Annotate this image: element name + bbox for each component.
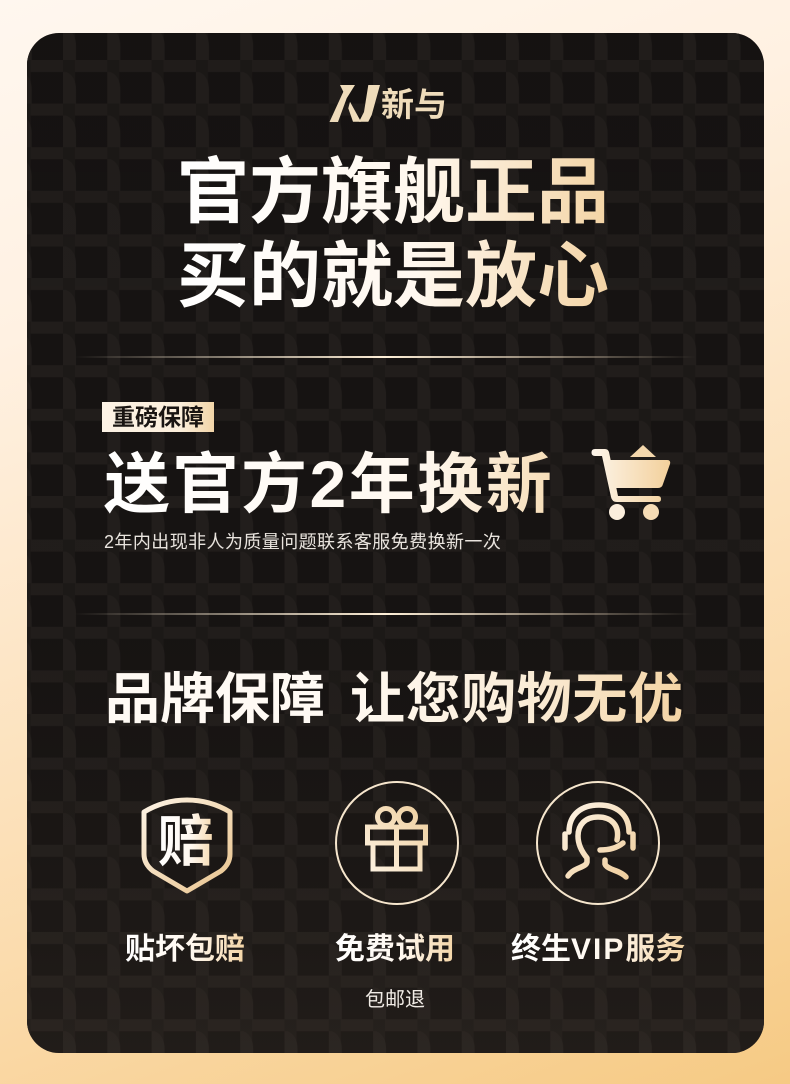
title line 2: 买的就是放心	[177, 237, 609, 317]
title	[177, 153, 609, 317]
tag: 重磅保障: 重磅保障	[112, 404, 204, 430]
icon: gift	[335, 781, 459, 905]
title line 1: 官方旗舰正品	[177, 153, 609, 233]
label: 贴坏包赔: 贴坏包赔	[125, 933, 245, 966]
label: 终生VIP服务: 终生VIP服务	[511, 933, 685, 966]
subtitle: 2年内出现非人为质量问题联系客服免费换新一次	[104, 532, 501, 552]
heading part: 品牌保障: 品牌保障	[105, 668, 325, 730]
icon: compensation shield: 赔	[158, 810, 214, 873]
heading: brand guarantee	[105, 668, 684, 730]
logo: 新与	[381, 86, 447, 123]
heading part: 让您购物无优: 让您购物无优	[350, 668, 684, 730]
icon: customer service	[536, 781, 660, 905]
label: 免费试用: 免费试用	[335, 933, 455, 966]
logo	[330, 85, 447, 123]
icon: compensation shield	[142, 798, 232, 894]
icon: shopping cart	[592, 445, 670, 520]
heading: 送官方2年换新: 送官方2年换新	[104, 447, 554, 521]
note: 包邮退: 包邮退	[365, 989, 425, 1011]
